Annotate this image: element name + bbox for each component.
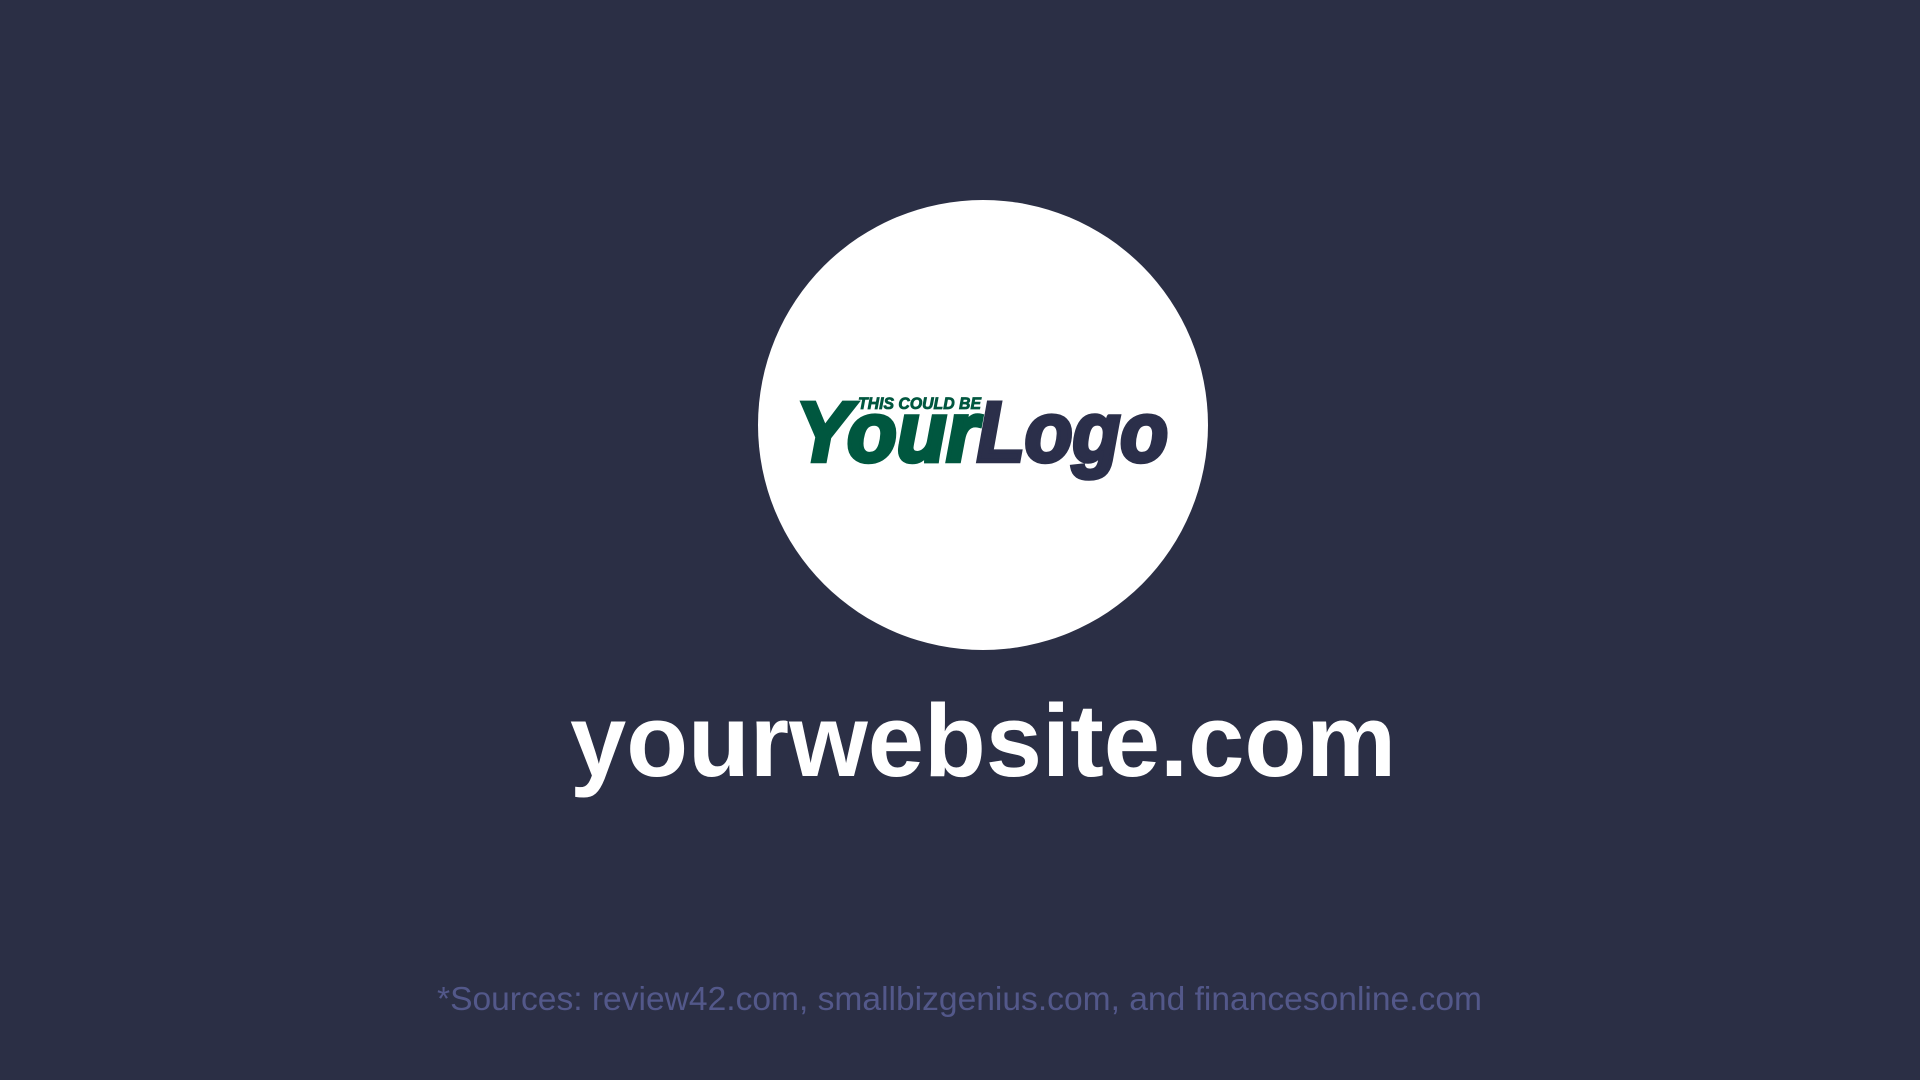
logo tagline: THIS COULD BE [858, 395, 982, 413]
logo word: Your: Your [796, 385, 982, 479]
logo word: Logo: Logo [977, 385, 1168, 479]
sources footnote: *Sources: review42.com, smallbizgenius.com, and financesonline.com [437, 980, 1482, 1017]
logo badge: white circle with logo [758, 200, 1208, 650]
website url heading: yourwebsite.com [570, 683, 1396, 798]
white circle [758, 200, 1208, 650]
